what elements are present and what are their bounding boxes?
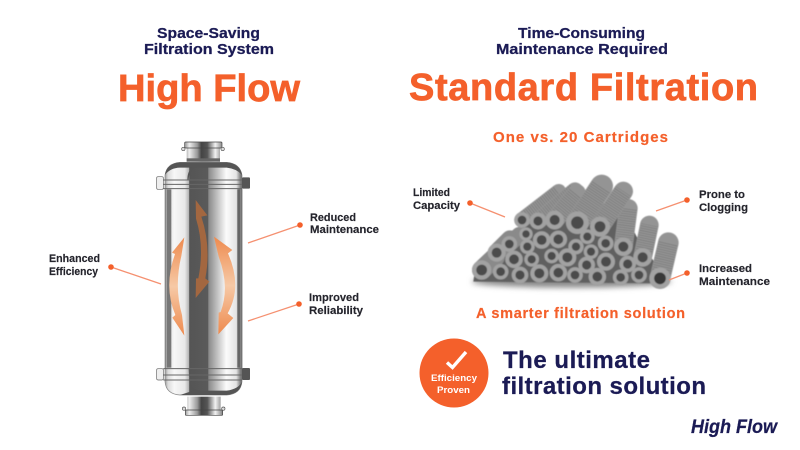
callout: prone to clogging — [656, 189, 748, 214]
callout: improved reliability: Reliability — [309, 305, 364, 317]
heading: standard filtration subtitle: Time-Consuming — [518, 26, 645, 42]
cartridge end faces — [474, 213, 668, 287]
heading: high flow subtitle — [144, 26, 274, 58]
title: High Flow: High Flow — [118, 68, 300, 110]
top nozzle — [182, 142, 224, 162]
callout: increased maintenance: Maintenance — [699, 276, 770, 288]
callout: increased maintenance — [669, 263, 770, 288]
arrow: center down flow — [196, 200, 209, 298]
badge: efficiency proven: Proven — [437, 385, 470, 396]
subheading: one vs 20 cartridges: One vs. 20 Cartridges — [493, 129, 668, 146]
callout: prone to clogging: Prone to — [699, 189, 745, 201]
bottom flange — [157, 368, 250, 380]
callout: limited capacity — [413, 187, 505, 217]
vessel top dome shading — [165, 162, 242, 180]
callout: increased maintenance: Increased — [699, 263, 752, 275]
badge: efficiency proven: Efficiency — [431, 373, 478, 384]
callout: prone to clogging: Clogging — [699, 202, 748, 214]
callout: improved reliability: Improved — [309, 292, 359, 304]
callout: limited capacity: Limited — [413, 187, 450, 199]
vessel bottom dome shading — [180, 369, 242, 395]
vessel body — [165, 162, 242, 395]
headline: the ultimate filtration solution: The ultimate — [503, 347, 650, 374]
callout: enhanced efficiency: Enhanced — [49, 253, 100, 265]
callout: enhanced efficiency — [49, 253, 161, 284]
illustration: high flow filter vessel — [157, 142, 250, 415]
text: a smarter filtration solution: A smarter filtration solution — [476, 306, 685, 322]
pile backfill — [473, 203, 660, 283]
arrow: left circulation — [169, 237, 184, 336]
top flange — [157, 177, 250, 189]
heading: high flow subtitle: Filtration System — [144, 42, 274, 58]
bottom nozzle — [182, 397, 225, 415]
badge: efficiency proven — [420, 338, 488, 408]
callout: limited capacity: Capacity — [413, 200, 461, 212]
heading: standard filtration subtitle — [496, 26, 668, 58]
callout: improved reliability — [248, 292, 364, 321]
heading: standard filtration subtitle: Maintenance Required — [496, 42, 668, 58]
callout: enhanced efficiency: Efficiency — [49, 266, 99, 278]
left and right glass edges — [165, 189, 242, 368]
logo: High Flow: High Flow — [691, 417, 778, 438]
headline: the ultimate filtration solution: filtration solution — [502, 373, 706, 400]
callout: reduced maintenance — [248, 212, 379, 243]
illustration: pile of cartridges — [472, 186, 672, 288]
title: Standard Filtration: Standard Filtration — [409, 67, 758, 109]
headline: the ultimate filtration solution — [502, 347, 706, 400]
heading: high flow subtitle: Space-Saving — [157, 26, 260, 42]
callout: reduced maintenance: Reduced — [310, 212, 356, 224]
callout: reduced maintenance: Maintenance — [310, 224, 379, 236]
arrow: right circulation — [214, 237, 235, 334]
icon: check mark — [447, 352, 466, 368]
